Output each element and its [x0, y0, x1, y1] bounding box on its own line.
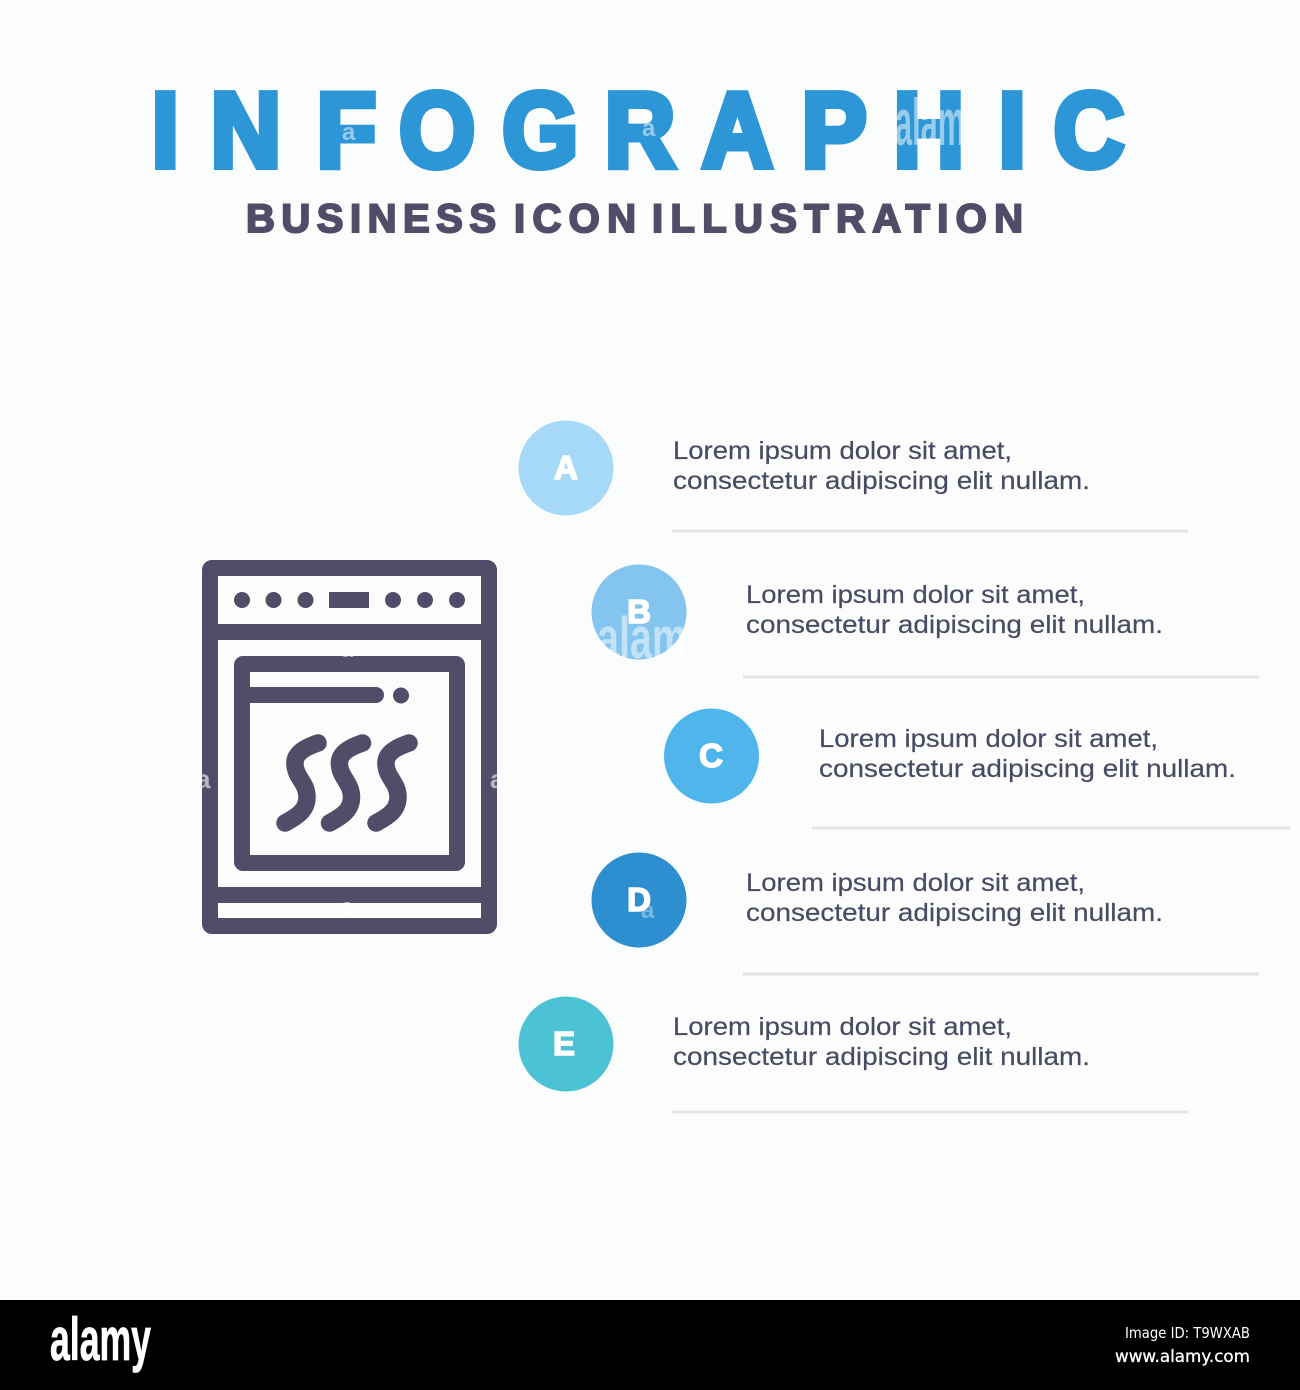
watermarks: alam: [597, 606, 687, 671]
text E: [673, 1013, 1090, 1071]
item A: [518, 420, 1188, 532]
item C: [664, 708, 1290, 830]
watermarks: a: [641, 897, 655, 924]
letter D: D: [627, 881, 651, 918]
text D: [746, 869, 1163, 927]
item D: [592, 852, 1259, 976]
text C: consectetur adipiscing elit nullam.: [819, 755, 1236, 783]
text C: [819, 725, 1236, 783]
text D: Lorem ipsum dolor sit amet,: [746, 869, 1085, 897]
footer logo: alamy: [50, 1306, 151, 1373]
watermarks: [0, 85, 965, 938]
badge C: [664, 708, 759, 804]
text A: Lorem ipsum dolor sit amet,: [673, 437, 1012, 465]
badge D: [592, 852, 686, 948]
letter A: A: [554, 449, 578, 486]
website: www.alamy.com: [1115, 1347, 1250, 1367]
item E: [518, 996, 1188, 1114]
subtitle: BUSINESS: [246, 197, 496, 241]
text A: consectetur adipiscing elit nullam.: [673, 467, 1090, 495]
watermarks: alamy: [0, 95, 104, 158]
text D: consectetur adipiscing elit nullam.: [746, 899, 1163, 927]
letter C: C: [699, 737, 723, 774]
subtitle: [246, 197, 1023, 241]
watermarks: a: [341, 894, 354, 919]
subtitle: ICON: [514, 197, 636, 241]
text A: [673, 437, 1090, 495]
text E: consectetur adipiscing elit nullam.: [673, 1043, 1090, 1071]
watermarks: a: [341, 637, 354, 662]
icon: oven: [210, 568, 489, 926]
watermarks: a: [490, 764, 505, 794]
item B: [592, 564, 1259, 678]
text E: Lorem ipsum dolor sit amet,: [673, 1013, 1012, 1041]
text B: [746, 581, 1163, 639]
image id: Image ID: T9WXAB: [1125, 1324, 1250, 1342]
watermarks: a: [196, 764, 211, 794]
letter E: E: [553, 1025, 575, 1062]
text B: consectetur adipiscing elit nullam.: [746, 611, 1163, 639]
text: alam: [895, 85, 965, 159]
watermarks: a: [642, 115, 656, 142]
footer bar: [0, 1300, 1300, 1390]
letter B: B: [627, 593, 651, 630]
badge E: [518, 996, 614, 1092]
badge B: [592, 564, 686, 660]
badge A: [518, 420, 614, 516]
subtitle: ILLUSTRATION: [652, 197, 1023, 241]
text B: Lorem ipsum dolor sit amet,: [746, 581, 1085, 609]
text C: Lorem ipsum dolor sit amet,: [819, 725, 1158, 753]
title: INFOGRAPHIC: [152, 71, 1124, 189]
watermarks: alamy: [0, 875, 104, 938]
watermarks: a: [342, 119, 356, 146]
